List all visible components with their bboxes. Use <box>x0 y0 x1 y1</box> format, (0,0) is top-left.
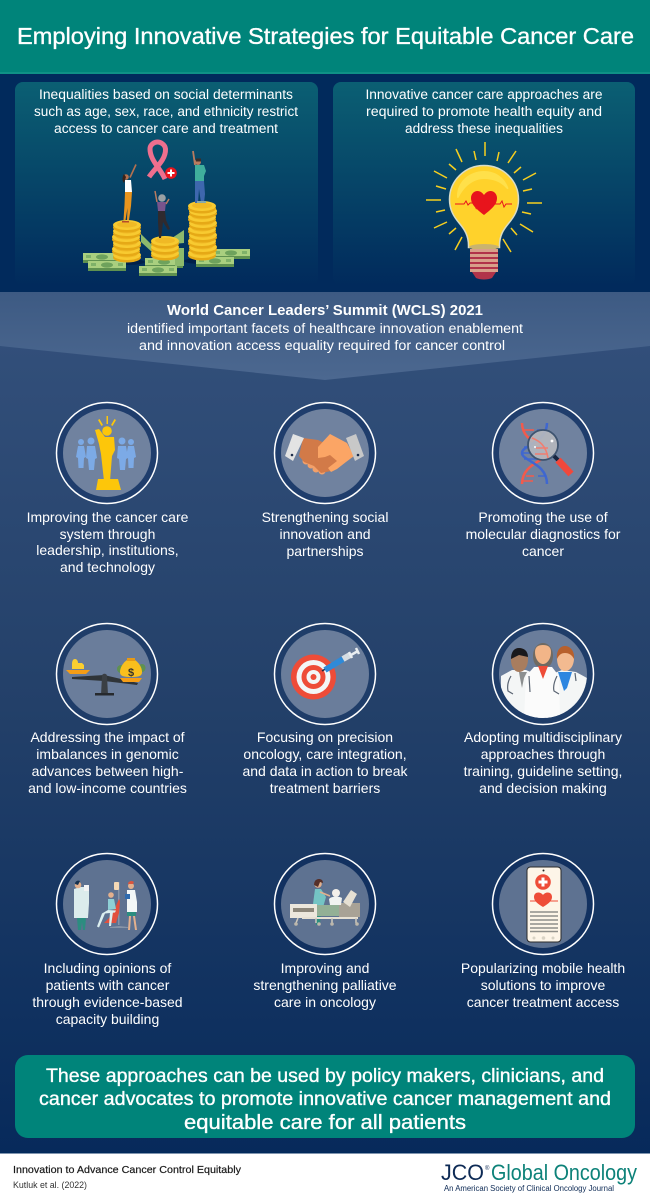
title banner <box>0 0 650 74</box>
logo: JCO Global Oncology: Global Oncology <box>491 1160 637 1185</box>
conclusion callout: equitable care for all patients <box>184 1111 466 1134</box>
panel: inequalities <box>15 82 318 286</box>
text: oncology, care integration, <box>243 746 407 762</box>
item 6: multidisciplinary <box>464 624 622 796</box>
text: inequalities description: access to cancer care and treatment <box>54 121 278 137</box>
banner: WCLS summit <box>0 292 650 380</box>
text: capacity building <box>56 1011 159 1027</box>
icon: pink ribbon <box>149 142 177 179</box>
text: Promoting the use of <box>478 509 608 525</box>
item 3: molecular diagnostics <box>466 402 621 559</box>
text: patients with cancer <box>46 977 170 993</box>
icon: unbalanced scale <box>56 624 158 724</box>
icon: three doctors <box>492 624 594 724</box>
text <box>32 960 183 1027</box>
main background with gradient <box>0 340 650 1153</box>
citation: article title and authors <box>13 1164 242 1190</box>
text: Including opinions of <box>44 960 171 976</box>
text: innovation description: required to promote health equity and <box>366 104 602 120</box>
figure: woman with orange trousers <box>122 164 136 222</box>
text: strengthening palliative <box>253 977 397 993</box>
icon: light bulb with heart <box>426 142 542 280</box>
item 9: mobile health <box>461 854 625 1010</box>
footer <box>0 1152 650 1200</box>
panel: innovative approaches <box>333 82 635 286</box>
text: and low-income countries <box>28 780 187 796</box>
text: system through <box>60 526 155 542</box>
text: Addressing the impact of <box>30 729 185 745</box>
logo: JCO Global Oncology: An American Society of Clinical Oncology Journal <box>444 1184 614 1193</box>
conclusion callout <box>15 1055 635 1138</box>
text: inequalities description: such as age, sex, race, and ethnicity restrict <box>34 104 298 120</box>
icon: leader trophy <box>56 402 158 504</box>
text: inequalities description: Inequalities based on social determinants <box>39 87 293 103</box>
item 4: genomic imbalances <box>28 624 187 796</box>
figure: older woman jumping <box>155 191 170 238</box>
text: cancer <box>522 543 564 559</box>
banner: WCLS summit: identified important facets of healthcare innovation enablement <box>127 321 523 337</box>
text: and technology <box>60 559 155 575</box>
citation: article title and authors: Kutluk et al. (2022) <box>13 1180 87 1190</box>
text: leadership, institutions, <box>36 542 179 558</box>
text: Strengthening social <box>262 509 388 525</box>
icon: target and syringe <box>274 624 376 724</box>
figure: man in teal shirt <box>193 151 206 203</box>
text: treatment barriers <box>270 780 380 796</box>
text: approaches through <box>481 746 605 762</box>
text <box>461 960 625 1010</box>
text: through evidence-based <box>32 994 183 1010</box>
item 2: social innovation <box>262 402 388 559</box>
text: molecular diagnostics for <box>466 526 621 542</box>
text: imbalances in genomic <box>36 746 179 762</box>
text <box>27 509 189 575</box>
text: innovation description <box>366 87 603 137</box>
text: training, guideline setting, <box>464 763 622 779</box>
text <box>242 729 408 796</box>
text: partnerships <box>286 543 364 559</box>
text: Focusing on precision <box>257 729 393 745</box>
text: and decision making <box>479 780 607 796</box>
text: innovation and <box>279 526 371 542</box>
logo: JCO Global Oncology <box>441 1160 637 1193</box>
text <box>262 509 388 559</box>
text: Improving the cancer care <box>27 509 189 525</box>
text: care in oncology <box>274 994 376 1010</box>
text <box>253 960 397 1010</box>
item 8: palliative care <box>253 854 397 1010</box>
icon: DNA under magnifier <box>492 402 594 504</box>
text: and data in action to break <box>242 763 408 779</box>
banner: WCLS summit: and innovation access equality required for cancer control <box>139 338 505 354</box>
text: solutions to improve <box>481 977 605 993</box>
text: innovation description: address these inequalities <box>405 121 563 137</box>
text: innovation description: Innovative cancer care approaches are <box>366 87 603 103</box>
text: Improving and <box>281 960 369 976</box>
title banner: Employing Innovative Strategies for Equitable Cancer Care <box>17 23 634 49</box>
logo: JCO Global Oncology: JCO <box>441 1160 484 1185</box>
text: inequalities description <box>34 87 298 137</box>
text: Adopting multidisciplinary <box>464 729 622 745</box>
icon: handshake <box>274 402 376 504</box>
logo: JCO Global Oncology: ® <box>485 1165 490 1172</box>
text: advances between high- <box>32 763 184 779</box>
icon: patient in hospital bed <box>274 854 376 954</box>
icon: people on coin stacks reaching for a ribbon <box>83 142 250 276</box>
text <box>28 729 187 796</box>
text: cancer treatment access <box>467 994 619 1010</box>
conclusion callout: These approaches can be used by policy makers, clinicians, and <box>46 1065 604 1087</box>
banner: WCLS summit: World Cancer Leaders’ Summit (WCLS) 2021 <box>167 302 483 319</box>
icon: patient receiving infusion <box>56 854 158 954</box>
text: Popularizing mobile health <box>461 960 625 976</box>
text <box>466 509 621 559</box>
item 5: precision oncology <box>242 624 408 796</box>
icon: phone with health app <box>492 854 594 954</box>
conclusion callout: cancer advocates to promote innovative cancer management and <box>39 1088 611 1110</box>
item 7: patient opinions <box>32 854 183 1027</box>
text <box>464 729 622 796</box>
item 1: cancer care system <box>27 402 189 575</box>
citation: article title and authors: Innovation to Advance Cancer Control Equitably <box>13 1164 242 1176</box>
icon: unbalanced scale: $ <box>128 667 134 679</box>
